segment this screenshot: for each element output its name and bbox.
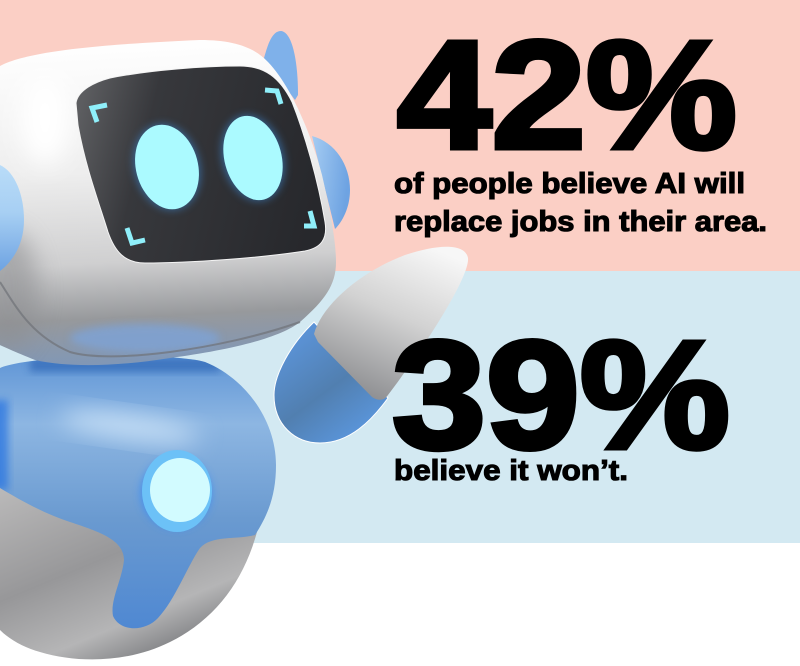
robot screen bbox=[76, 66, 326, 263]
body lower shell bbox=[0, 480, 258, 659]
panel: pink background bbox=[0, 0, 800, 271]
robot arm bbox=[274, 247, 468, 443]
stat: 42%: 42% bbox=[397, 9, 737, 181]
body blue upper shell bbox=[0, 356, 276, 628]
robot illustration bbox=[0, 31, 468, 659]
screen panel bbox=[76, 66, 326, 263]
arm sleeve bbox=[274, 322, 388, 443]
icon: corner brackets bbox=[92, 90, 314, 243]
text: 42% description line 1: of people believe AI will bbox=[394, 168, 745, 200]
icon: robot left ear bbox=[0, 165, 24, 271]
stat: 39%: 39% bbox=[392, 309, 730, 481]
head shading bbox=[0, 106, 221, 354]
icon: glowing chest button bbox=[140, 450, 212, 532]
icon: robot antenna bbox=[264, 31, 298, 100]
text: 39% description: believe it won’t. bbox=[394, 455, 628, 487]
icon: right eye bbox=[214, 109, 292, 207]
robot body bbox=[0, 356, 276, 659]
panel: blue background bbox=[0, 271, 800, 543]
icon: robot right ear bbox=[312, 136, 350, 229]
eye glow bbox=[124, 107, 294, 218]
robot head bbox=[0, 40, 336, 365]
body highlight bbox=[0, 358, 220, 490]
head seam bbox=[0, 282, 300, 356]
arm hand bbox=[314, 247, 468, 400]
text: 42% description line 2: replace jobs in their area. bbox=[394, 206, 767, 238]
icon: left eye bbox=[126, 117, 208, 217]
